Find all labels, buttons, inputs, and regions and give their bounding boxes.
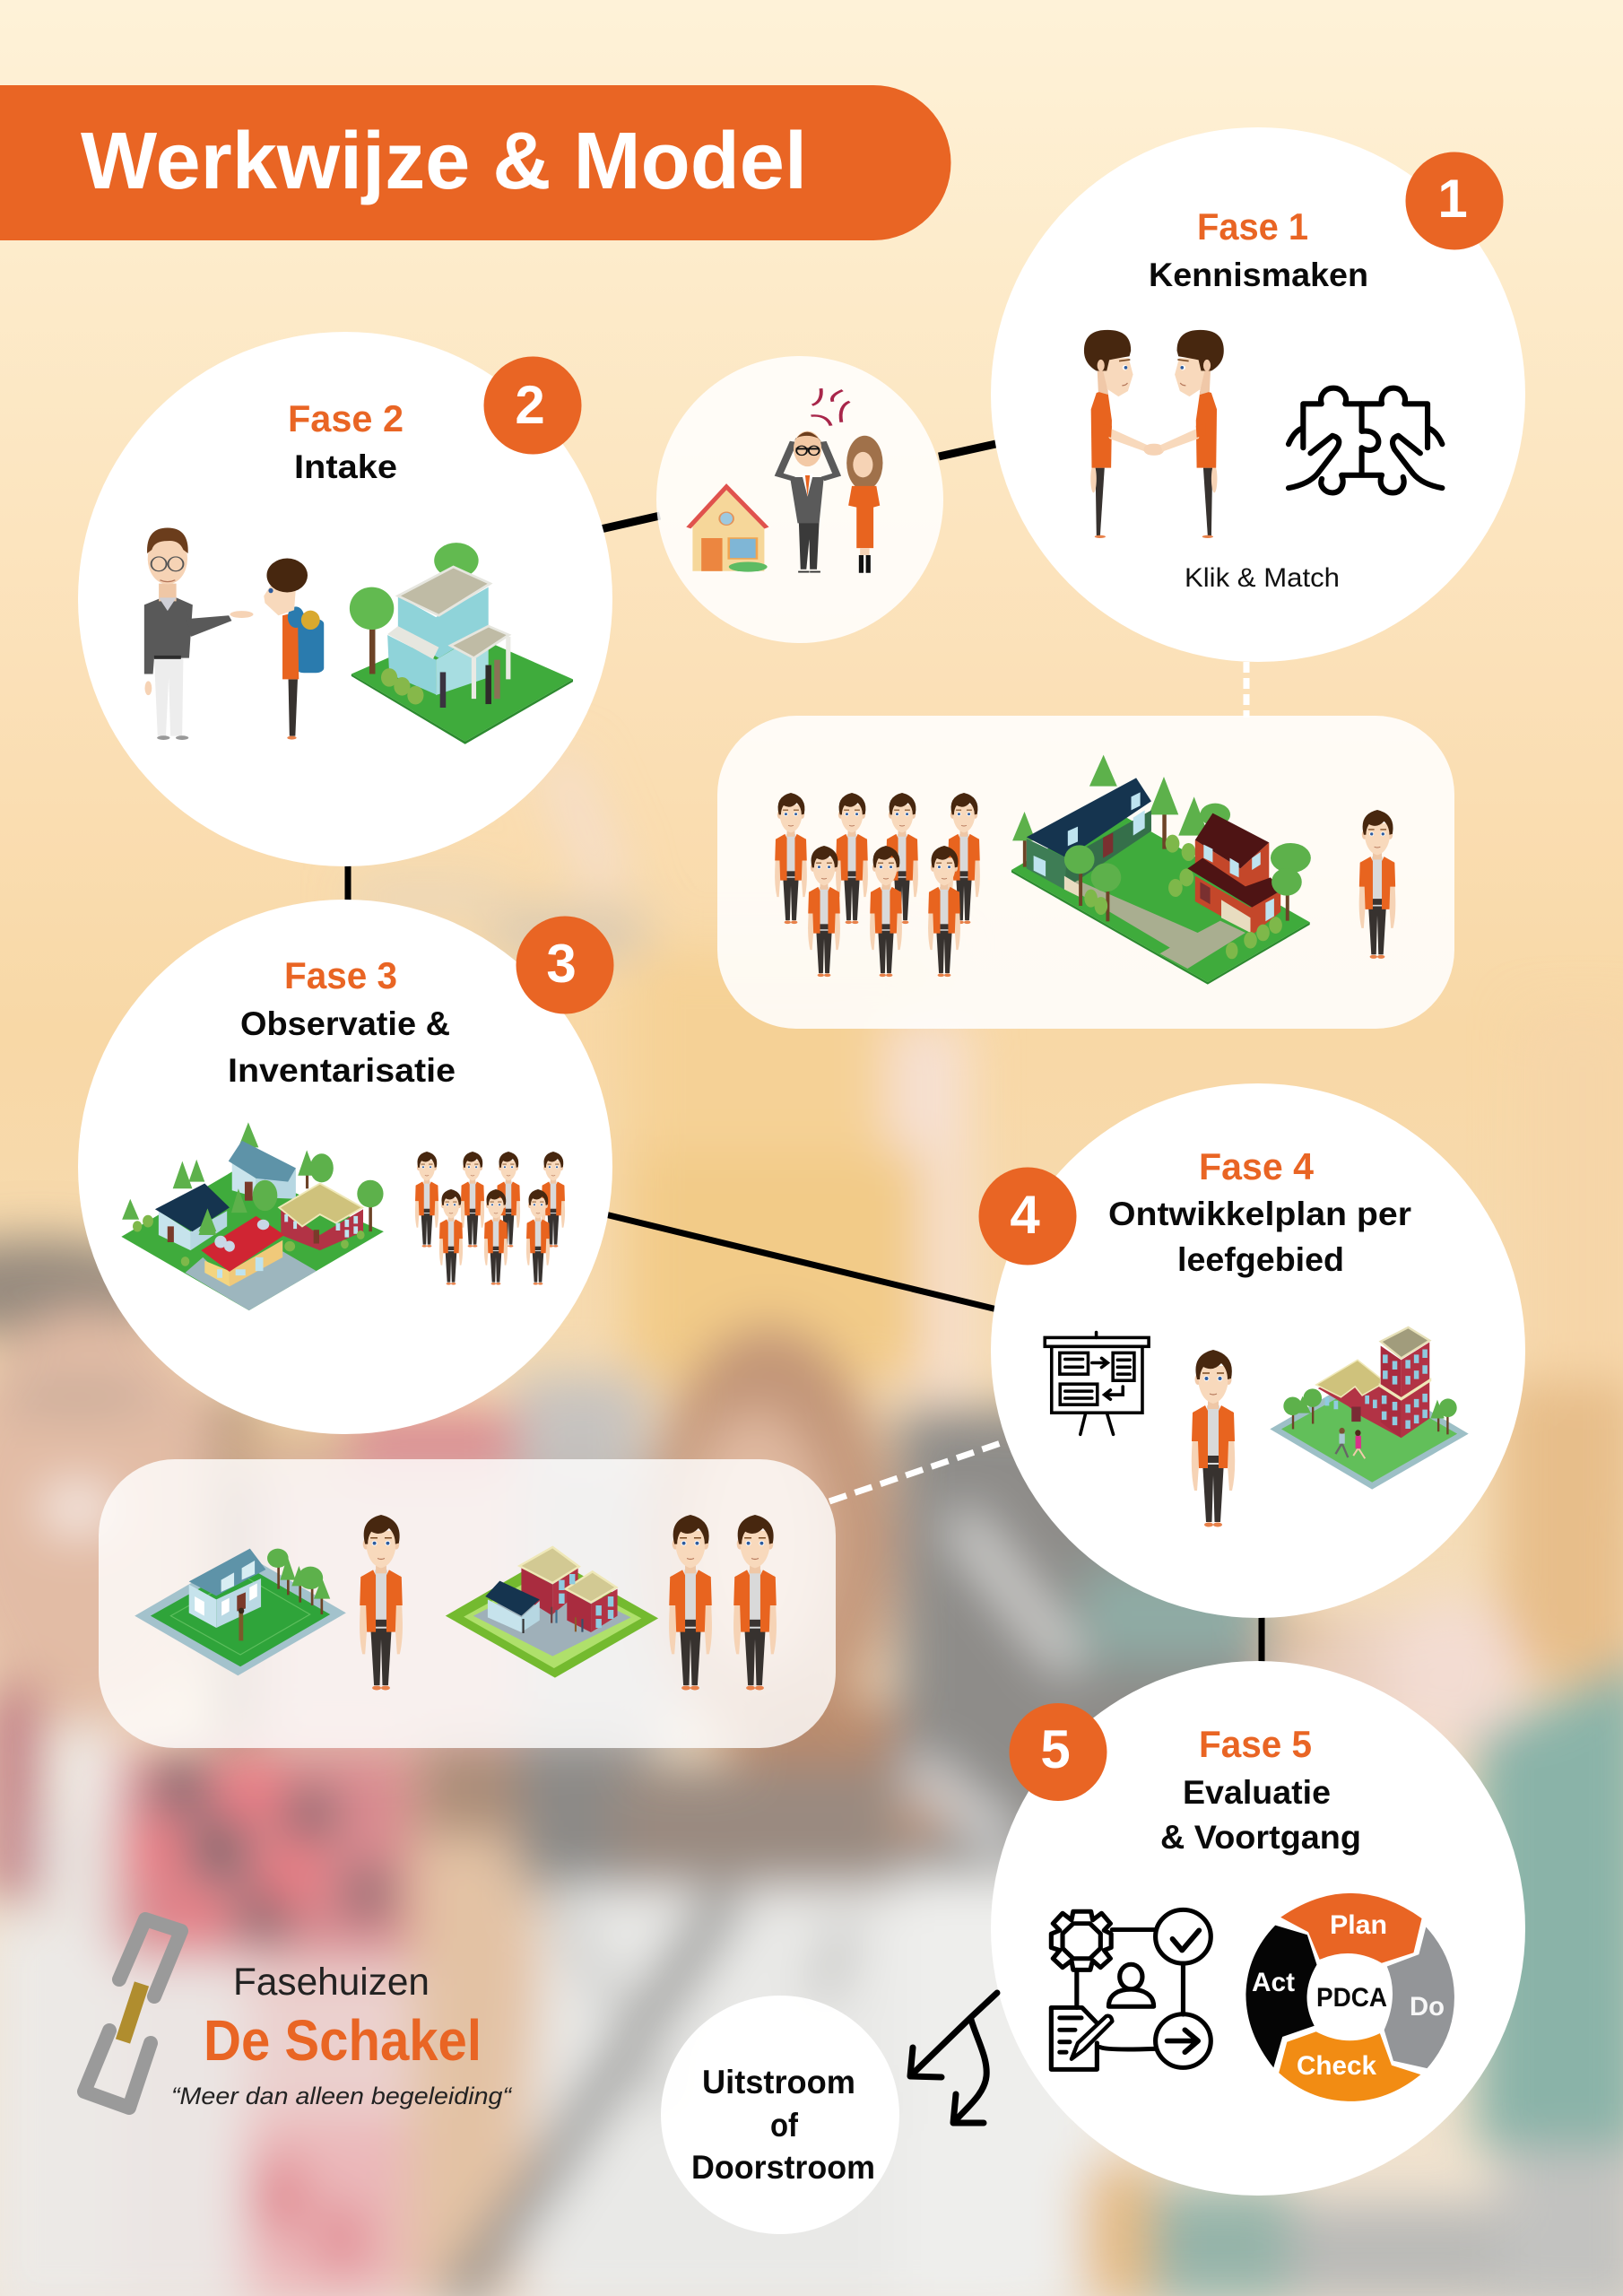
panel: fase 5 (991, 1661, 1525, 2196)
connector: fase 4 to fase 5 (1259, 1614, 1264, 1665)
illustration: coach and client (144, 528, 324, 740)
heading: fase 3: Fase 3 (284, 954, 397, 996)
subheading: kennismaken: Kennismaken (1149, 257, 1368, 293)
panel: fase 4 options (99, 1459, 836, 1748)
icon: chain links (84, 1919, 181, 2108)
chart: PDCA cycle: Act (1252, 1968, 1295, 1997)
logo text: Fasehuizen (233, 1961, 430, 2004)
badge 2: 2 (515, 375, 545, 435)
subheading: ontwikkelplan per leefgebied (1108, 1196, 1411, 1278)
two young adults (669, 1515, 777, 1691)
logo: Fasehuizen De Schakel (84, 1919, 513, 2109)
heading: fase 4: Fase 4 (1199, 1145, 1315, 1187)
icon: process cycle (1051, 1909, 1211, 2069)
illustration: neighbourhood (121, 1122, 384, 1310)
badge 3: 3 (546, 934, 577, 994)
subheading: evaluatie en voortgang (1160, 1774, 1361, 1856)
young adult (360, 1515, 403, 1691)
panel: fase 1 group and houses (717, 716, 1454, 1029)
panel: fase 4 (979, 1083, 1525, 1618)
chart: PDCA cycle: Plan (1330, 1910, 1387, 1940)
chart: PDCA cycle: Do (1410, 1992, 1445, 2022)
chart: PDCA cycle (1245, 1893, 1454, 2101)
badge 5: 5 (1040, 1719, 1071, 1779)
subheading: ontwikkelplan per leefgebied: leefgebied (1177, 1241, 1344, 1278)
young adult (1192, 1350, 1235, 1526)
panel: uitstroom of doorstroom: Uitstroom (702, 2064, 855, 2100)
illustration: two houses (1011, 755, 1311, 985)
subheading: observatie en inventarisatie: Observatie & (240, 1005, 450, 1042)
panel: uitstroom of doorstroom: of (770, 2107, 799, 2144)
panel: uitstroom of doorstroom (661, 1996, 899, 2234)
heading: fase 5: Fase 5 (1199, 1723, 1312, 1765)
badge 1 (1406, 152, 1503, 249)
badge 3 (516, 917, 613, 1013)
arrows: to uitstroom and doorstroom (910, 1993, 997, 2123)
panel: fase 2 (78, 332, 612, 866)
subheading: ontwikkelplan per leefgebied: Ontwikkelplan per (1108, 1196, 1411, 1232)
connector: problem circle to fase 1 (939, 443, 1000, 457)
connector: fase 4 dashed to panel (829, 1440, 1009, 1501)
illustration: apartment block (1270, 1327, 1469, 1490)
subheading: evaluatie en voortgang: & Voortgang (1160, 1819, 1361, 1856)
group of young adults (415, 1152, 565, 1285)
illustration: modern house (350, 543, 573, 744)
subheading: observatie en inventarisatie (228, 1005, 456, 1089)
tagline: “Meer dan alleen begeleiding“ (171, 2083, 513, 2109)
illustration: villa (135, 1549, 346, 1675)
title: Werkwijze & Model (81, 117, 807, 206)
panel: fase 1 (991, 127, 1525, 662)
panel: fase 3 (78, 900, 613, 1434)
connector: fase 3 to fase 4 (605, 1214, 997, 1309)
badge 5 (1010, 1703, 1107, 1801)
subheading: observatie en inventarisatie: Inventarisatie (228, 1052, 456, 1089)
icon: handshake (1084, 330, 1224, 538)
icon: puzzle (1289, 388, 1442, 492)
badge 4: 4 (1010, 1185, 1040, 1245)
subheading: intake: Intake (294, 448, 397, 485)
icon: presentation board (1045, 1332, 1149, 1434)
icon: house, angry couple (689, 388, 883, 573)
young adult (1359, 810, 1395, 959)
logo: Fasehuizen De Schakel: De Schakel (204, 2008, 482, 2073)
banner (0, 85, 950, 240)
panel: uitstroom of doorstroom: Doorstroom (691, 2149, 875, 2186)
connector: fase 1 dashed to group panel (1243, 662, 1250, 718)
heading: fase 1: Fase 1 (1197, 205, 1308, 248)
panel: problem circle (656, 356, 943, 643)
chart: PDCA cycle: PDCA (1316, 1983, 1387, 2013)
connector: fase 2 to problem circle (601, 516, 660, 529)
heading: fase 2: Fase 2 (288, 397, 404, 439)
badge 2 (484, 357, 581, 454)
badge 1: 1 (1437, 169, 1468, 229)
subheading: evaluatie en voortgang: Evaluatie (1183, 1774, 1331, 1811)
group of young adults (775, 793, 980, 977)
caption: klik en match: Klik & Match (1185, 563, 1340, 593)
chart: PDCA cycle: Check (1297, 2051, 1376, 2081)
connector: fase 2 to fase 3 (344, 861, 352, 906)
badge 4 (979, 1168, 1076, 1265)
illustration: buildings on green plot (446, 1547, 658, 1678)
